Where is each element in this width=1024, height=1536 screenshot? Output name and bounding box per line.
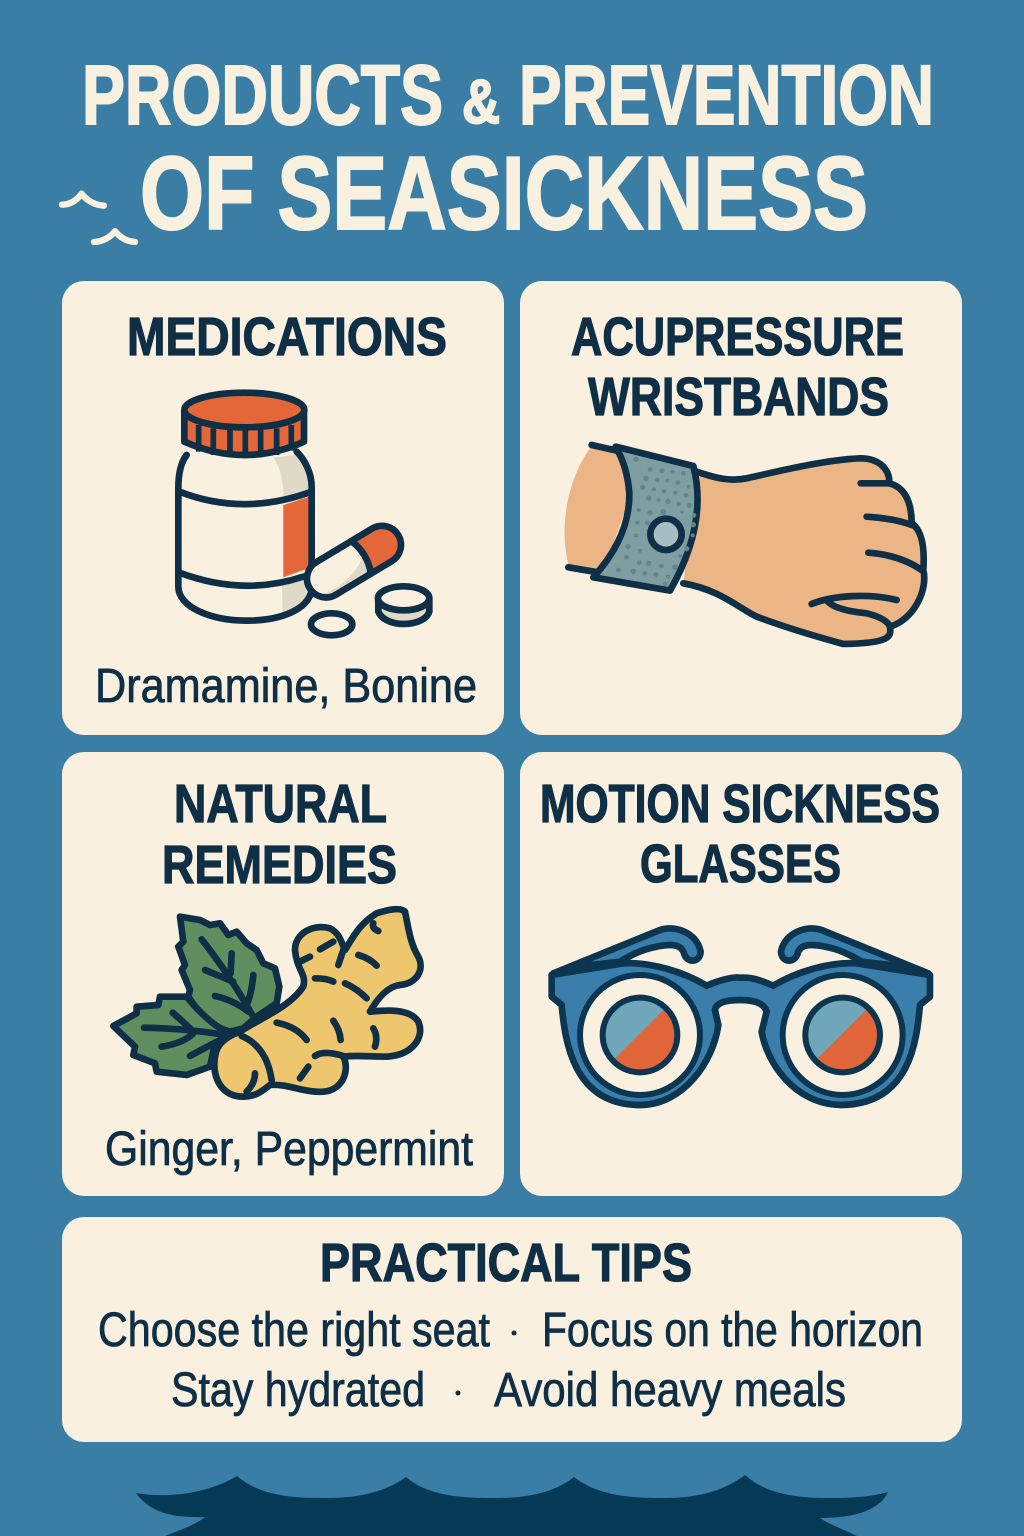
icon: small title waves — [62, 194, 135, 242]
icon: ginger root and mint leaves — [113, 909, 421, 1097]
heading: acupressure wristbands: ACUPRESSURE — [571, 307, 904, 367]
heading: motion sickness glasses: GLASSES — [640, 834, 841, 894]
title — [82, 48, 934, 252]
heading: motion sickness glasses — [540, 774, 940, 894]
title: PRODUCTS — [82, 48, 443, 142]
tips row 2: Stay hydrated — [171, 1364, 425, 1417]
heading: practical tips: PRACTICAL TIPS — [320, 1233, 692, 1293]
heading: medications: MEDICATIONS — [127, 307, 447, 367]
heading: natural remedies — [162, 774, 397, 895]
capsule — [300, 519, 408, 605]
heading: natural remedies: NATURAL — [174, 774, 387, 834]
left lens — [603, 998, 677, 1072]
bottom waves — [136, 1475, 888, 1536]
heading: natural remedies: REMEDIES — [162, 835, 397, 895]
panel: motion sickness glasses — [520, 752, 962, 1196]
panel: acupressure wristbands — [520, 281, 962, 735]
title: & — [462, 68, 500, 137]
tips row 1: Focus on the horizon — [542, 1304, 923, 1357]
icon: wrist with acupressure band — [565, 445, 924, 644]
tips row 1 — [98, 1304, 923, 1357]
icon: motion sickness glasses — [552, 928, 930, 1105]
caption: medications: Dramamine, Bonine — [95, 660, 477, 713]
tips row 2: Avoid heavy meals — [494, 1364, 846, 1417]
panel: natural remedies — [62, 752, 504, 1196]
caption: natural remedies: Ginger, Peppermint — [105, 1123, 473, 1176]
panel: medications — [62, 281, 504, 735]
tips row 2 — [171, 1364, 846, 1417]
panel: practical tips — [62, 1217, 962, 1442]
heading: acupressure wristbands — [571, 307, 904, 427]
icon: pill bottle and pills — [178, 393, 429, 635]
tips row 1: Choose the right seat — [98, 1304, 490, 1357]
heading: acupressure wristbands: WRISTBANDS — [588, 367, 889, 427]
band texture — [616, 457, 696, 586]
right lens — [805, 998, 880, 1072]
